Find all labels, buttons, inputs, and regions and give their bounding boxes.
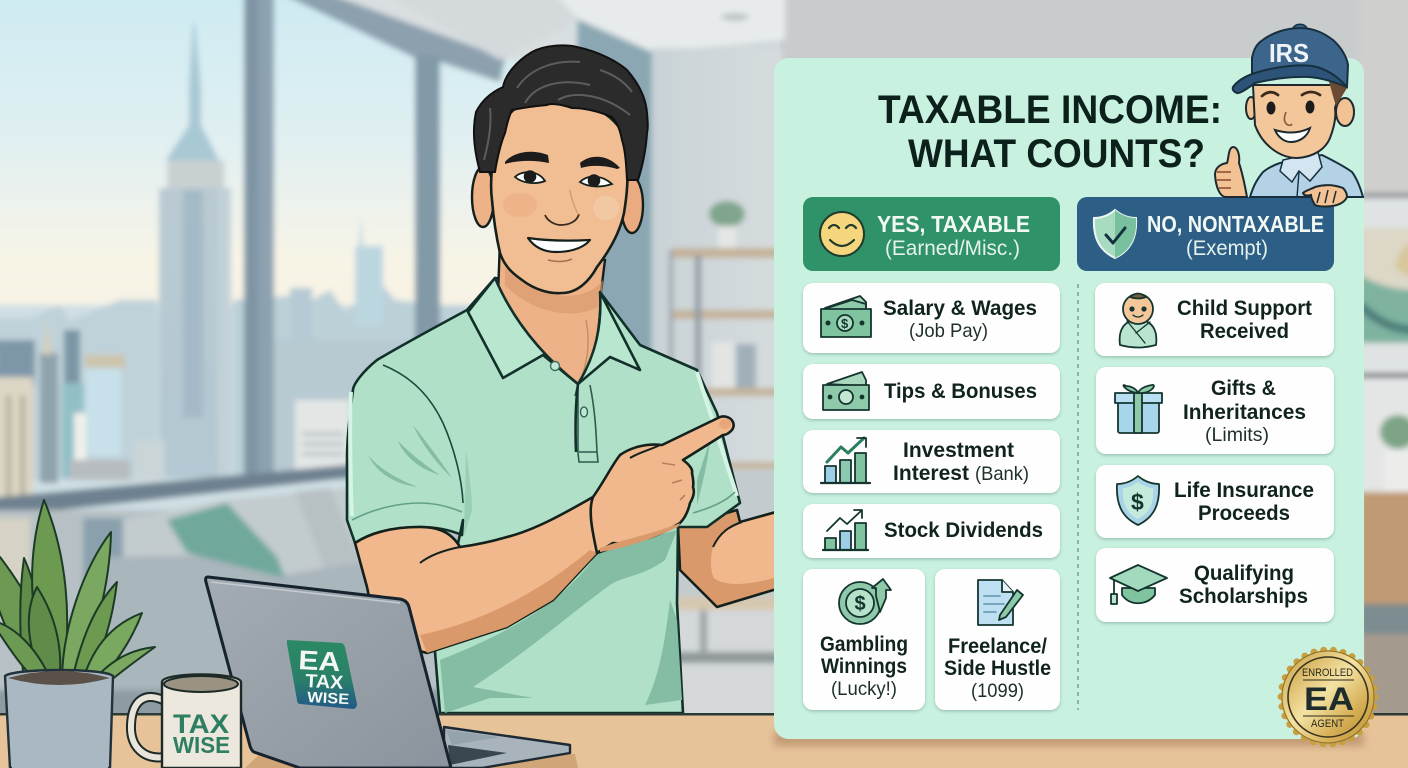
card: gifts and inheritances (1096, 367, 1334, 454)
card: investment interest: (Bank) (975, 463, 1029, 485)
header: yes, taxable: YES, TAXABLE (877, 211, 1030, 237)
eyes (515, 172, 545, 183)
icon: baby (1120, 294, 1156, 348)
sofa and floor (0, 510, 470, 720)
ears (1246, 97, 1256, 119)
coffee mug (131, 674, 241, 768)
neck (498, 240, 605, 384)
cap (1252, 28, 1348, 87)
card: investment interest: Investment (903, 438, 1014, 462)
icon: cash stack: $ (841, 316, 849, 331)
card: investment interest (803, 430, 1060, 493)
potted plant (0, 500, 155, 768)
icon: coin with arrow: $ (854, 593, 866, 615)
card: tips and bonuses: Tips & Bonuses (884, 379, 1037, 403)
IRS agent mascot (1215, 24, 1364, 206)
shirt (347, 278, 740, 713)
smile (528, 238, 590, 252)
icon: cash stack (821, 296, 871, 337)
logo sticker (287, 640, 357, 709)
card: gambling winnings: (Lucky!) (831, 678, 897, 700)
card: life insurance: Life Insurance (1174, 478, 1314, 502)
ears (472, 167, 494, 227)
icon: coin with arrow (839, 579, 891, 624)
icon: growth chart (821, 438, 870, 483)
header: yes, taxable: (Earned/Misc.) (885, 237, 1020, 260)
desk (0, 713, 1408, 768)
icon: stock chart (823, 510, 868, 550)
card: gambling winnings (803, 569, 925, 710)
icon: smiley (820, 212, 864, 256)
laptop with EA Tax Wise sticker (206, 577, 570, 768)
main skyscraper (166, 23, 219, 160)
face (491, 98, 628, 293)
card: salary and wages: (Job Pay) (909, 320, 988, 342)
card: gambling winnings: Winnings (821, 654, 907, 678)
card: qualifying scholarships: Qualifying (1194, 561, 1294, 585)
shirt (1250, 155, 1363, 197)
hand over header (1303, 185, 1347, 206)
card: life insurance: Proceeds (1198, 501, 1290, 525)
title: TAXABLE INCOME: (878, 88, 1222, 132)
badge: enrolled agent seal: AGENT (1311, 718, 1344, 730)
nose (545, 214, 579, 225)
head (1253, 85, 1342, 158)
icon: dollar shield (1117, 476, 1159, 525)
title: WHAT COUNTS? (908, 132, 1205, 176)
placket (575, 384, 598, 462)
right wall (652, 48, 782, 608)
card: salary and wages (803, 283, 1060, 353)
badge: enrolled agent seal: EA (1304, 681, 1354, 717)
arm and pointing hand (355, 416, 734, 653)
badge: enrolled agent seal (1281, 650, 1375, 744)
divider (1077, 284, 1079, 710)
card: salary and wages: Salary & Wages (883, 296, 1037, 320)
ceiling (552, 0, 785, 52)
card: life insurance (1096, 465, 1334, 538)
icon: document and pencil (978, 580, 1023, 625)
card: stock dividends (803, 504, 1060, 558)
card: gambling winnings: Gambling (820, 632, 908, 656)
coffee mug: WISE (173, 732, 230, 758)
icon: shield check (1094, 210, 1136, 258)
desk lounge area (650, 470, 790, 600)
card: child support: Received (1200, 319, 1289, 343)
header: no, nontaxable (1077, 197, 1334, 271)
card: qualifying scholarships: Scholarships (1179, 584, 1308, 608)
header: yes, taxable (803, 197, 1060, 271)
logo sticker: TAX (305, 671, 344, 694)
card: gifts and inheritances: Gifts & (1211, 376, 1276, 400)
left buildings (0, 340, 35, 385)
card: child support: Child Support (1177, 296, 1312, 320)
hair (474, 45, 648, 180)
card: freelance side hustle: Side Hustle (944, 656, 1051, 680)
panel: taxable income (774, 24, 1375, 744)
card: gifts and inheritances: (Limits) (1205, 424, 1269, 446)
title (878, 88, 1222, 176)
logo sticker: WISE (307, 689, 350, 708)
icon: dollar shield: $ (1131, 489, 1144, 515)
card: investment interest: Interest (893, 461, 969, 485)
badge: enrolled agent seal: ENROLLED (1302, 667, 1353, 679)
bookshelf (672, 248, 782, 469)
icon: gift box (1115, 385, 1162, 433)
IRS agent mascot: IRS (1269, 38, 1309, 68)
card: tips and bonuses (803, 364, 1060, 419)
man's left arm behind panel (678, 508, 790, 607)
card: freelance side hustle (935, 569, 1060, 710)
man with polo shirt pointing at panel (347, 45, 790, 713)
distant skyline (0, 300, 157, 480)
card: freelance side hustle: Freelance/ (948, 634, 1047, 658)
right side of room (1360, 0, 1408, 195)
card: child support (1095, 283, 1334, 356)
icon: graduation cap (1110, 565, 1167, 604)
window frames (318, 0, 578, 60)
coffee mug: TAX (173, 709, 229, 739)
collar (468, 278, 640, 384)
card: stock dividends: Stock Dividends (884, 518, 1043, 542)
icon: banknotes (823, 372, 869, 410)
logo sticker: EA (298, 645, 341, 677)
header: no, nontaxable: NO, NONTAXABLE (1147, 211, 1324, 237)
eyebrows (505, 152, 549, 164)
card: freelance side hustle: (1099) (971, 680, 1024, 702)
header: no, nontaxable: (Exempt) (1186, 237, 1268, 260)
card: gifts and inheritances: Inheritances (1183, 400, 1306, 424)
card: qualifying scholarships (1096, 548, 1334, 622)
thumbs up (1215, 147, 1247, 197)
